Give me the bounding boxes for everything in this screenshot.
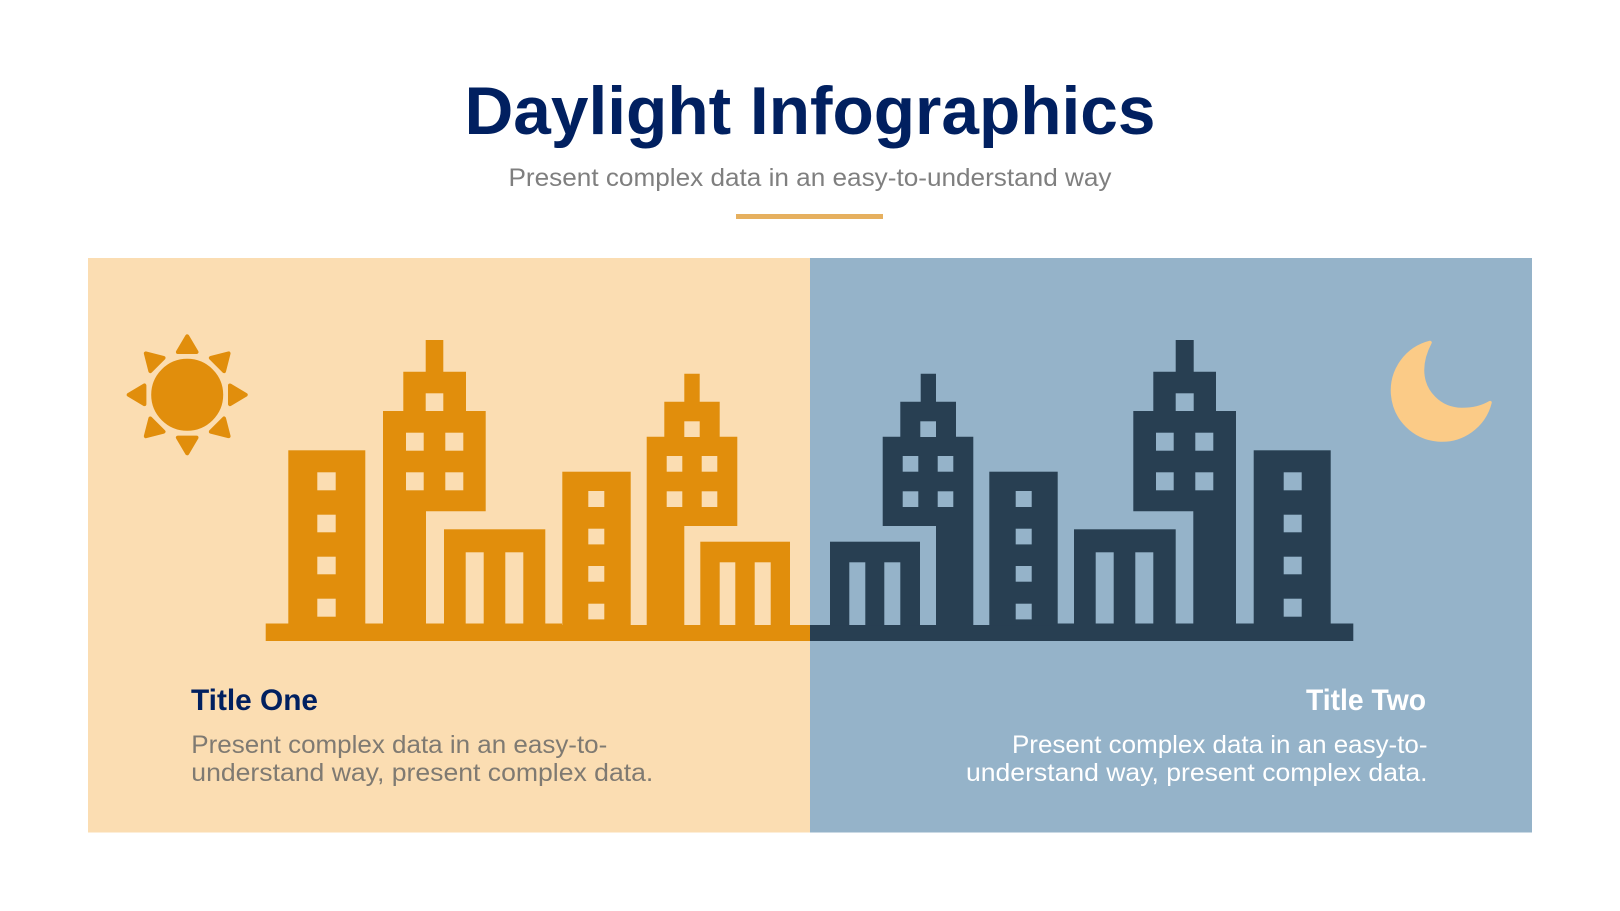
title: Daylight Infographics	[464, 73, 1156, 149]
body: title two	[966, 731, 1428, 787]
building: night tower E	[883, 374, 973, 626]
body: title one: understand way, present complex data.	[191, 759, 653, 787]
body: title two: Present complex data in an easy-to-	[1012, 731, 1428, 759]
building: night tower B	[1133, 340, 1236, 625]
building: day tower E	[647, 374, 737, 626]
panel: night	[810, 258, 1532, 832]
building: day low block F	[700, 542, 790, 626]
building: day low block C	[444, 529, 545, 625]
day city skyline	[266, 340, 810, 641]
building: night low block C	[1074, 529, 1176, 625]
building: day block A	[288, 450, 365, 625]
night city skyline	[810, 340, 1353, 641]
building: night block D	[989, 472, 1058, 625]
body: title one	[191, 731, 653, 787]
text block: title two	[966, 684, 1428, 787]
heading: title two: Title Two	[1306, 684, 1426, 717]
body: title two: understand way, present complex data.	[966, 759, 1428, 787]
body: title one: Present complex data in an easy-to-	[191, 731, 607, 759]
icon: moon	[1392, 342, 1490, 440]
subtitle: Present complex data in an easy-to-understand way	[508, 164, 1112, 192]
ground: day	[266, 624, 810, 641]
accent bar under heading	[736, 214, 883, 219]
building: night low block F	[830, 542, 920, 626]
heading: title one: Title One	[191, 684, 318, 717]
building: night block A	[1254, 450, 1331, 625]
ground: night	[810, 624, 1353, 641]
text block: title one	[191, 684, 653, 787]
panel: day	[88, 258, 810, 832]
icon: sun	[129, 336, 246, 453]
building: day tower B	[383, 340, 486, 625]
building: day block D	[562, 472, 631, 625]
